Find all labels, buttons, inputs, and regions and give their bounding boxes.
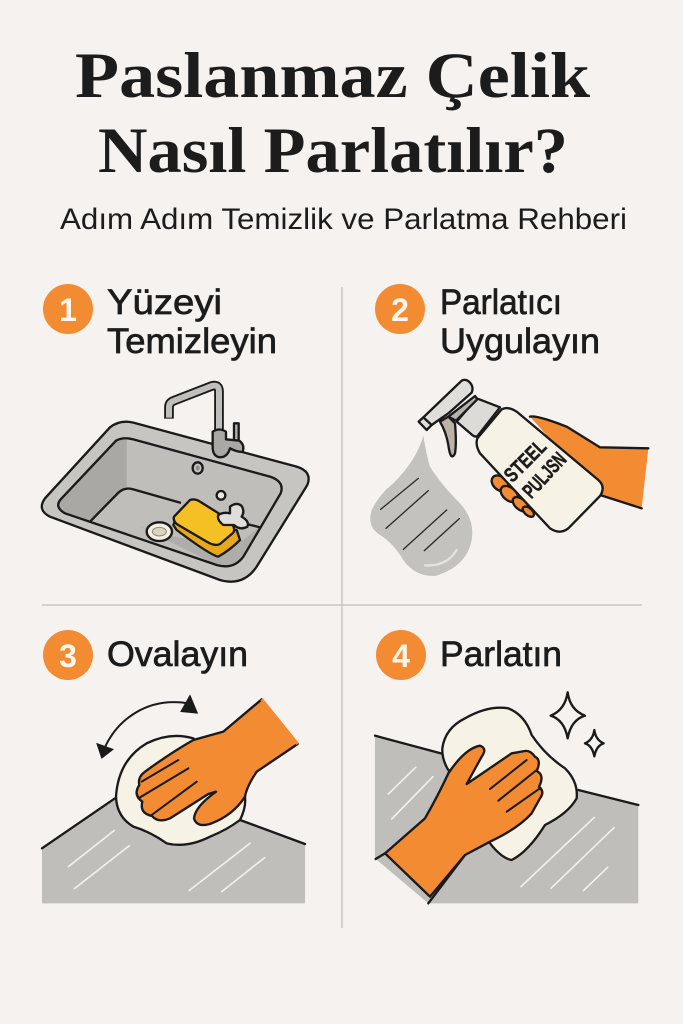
bottle label text: STEEL [500, 435, 551, 487]
icon: kitchen sink with sponge [42, 386, 309, 582]
step 4 number badge [376, 630, 426, 680]
step 3 heading: Ovalayın [107, 635, 248, 674]
step 2 number badge: 2 [391, 292, 409, 328]
step 4 number badge: 4 [392, 638, 410, 674]
sponge [173, 499, 240, 557]
faucet spout [169, 386, 219, 433]
drain [147, 522, 172, 541]
step 4 heading: Parlatın [440, 635, 562, 674]
title: Paslanmaz Çelik [75, 40, 591, 112]
motion arrow [97, 695, 198, 758]
cloth [442, 708, 577, 860]
drain hole [193, 462, 203, 474]
glove [385, 746, 542, 897]
step 1 number badge [43, 284, 93, 334]
step 2 heading: Uygulayın [440, 322, 600, 361]
step 2 number badge [375, 284, 425, 334]
icon: spray bottle in gloved hand [370, 380, 648, 576]
sprayer head [419, 380, 500, 456]
step 1 heading: Temizleyin [107, 322, 277, 361]
title [75, 40, 591, 187]
step 2 heading: Parlatıcı [440, 283, 562, 322]
step 3 number badge: 3 [59, 638, 77, 674]
bottle [477, 408, 603, 532]
bottle label text [500, 435, 571, 503]
step 3 number badge [43, 630, 93, 680]
glove back [530, 416, 648, 508]
panel: step 4 [375, 630, 638, 903]
panel: step 2 [370, 283, 648, 576]
subtitle: Adım Adım Temizlik ve Parlatma Rehberi [60, 203, 627, 236]
steel surface [42, 798, 305, 903]
panel: step 1 [42, 283, 309, 582]
steel surface [375, 736, 638, 903]
sparkles [551, 692, 604, 756]
step 1 heading: Yüzeyi [107, 283, 222, 322]
icon: gloved hand polishing with sparkles [375, 692, 638, 903]
bottle label text: PULJSN [518, 448, 571, 503]
soap bubbles [217, 491, 248, 528]
cloth [116, 736, 245, 845]
spray mist [370, 436, 472, 576]
glove [137, 699, 298, 825]
faucet base and lever [213, 423, 243, 457]
title: Nasıl Parlatılır? [98, 115, 568, 187]
glove fingers [489, 472, 536, 519]
icon: gloved hand rubbing with cloth [42, 695, 305, 903]
step 1 number badge: 1 [59, 292, 77, 328]
panel: step 3 [42, 630, 305, 903]
